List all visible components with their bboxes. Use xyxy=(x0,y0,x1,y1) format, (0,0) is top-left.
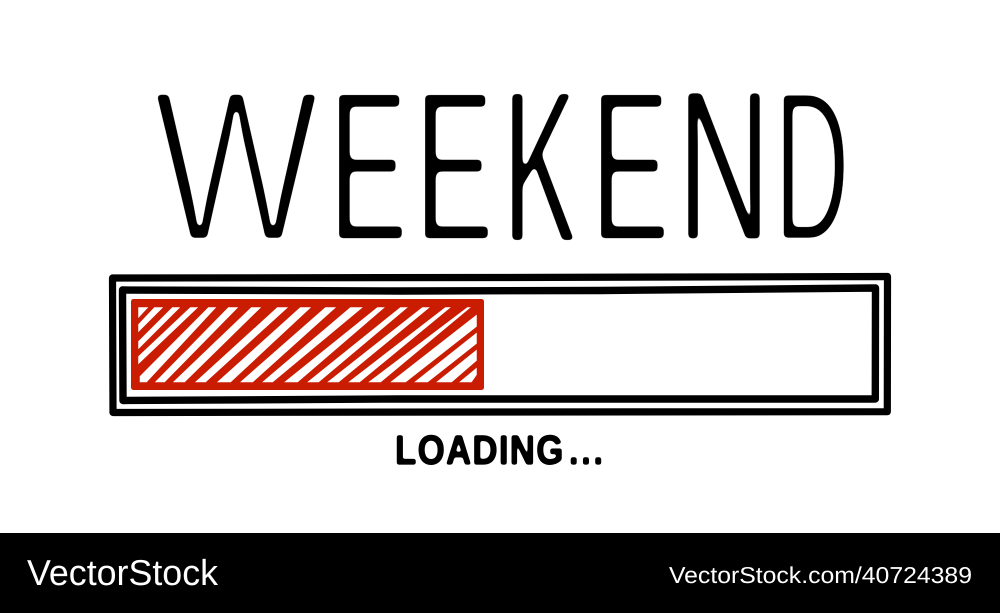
red progress fill with stripes xyxy=(131,299,484,390)
title: WEEKEND: N xyxy=(677,47,771,286)
title: WEEKEND: K xyxy=(502,40,580,295)
title: WEEKEND xyxy=(153,40,852,295)
footer logo text: VectorStock xyxy=(27,552,219,593)
loading label: LOADING... xyxy=(395,427,606,473)
footer image id: VectorStock.com/40724389 xyxy=(669,562,972,588)
inner frame xyxy=(122,288,876,400)
title: WEEKEND: D xyxy=(773,40,852,294)
progress bar xyxy=(112,276,888,412)
title: WEEKEND: E xyxy=(327,40,410,294)
title: WEEKEND: W xyxy=(153,45,320,288)
title: WEEKEND: E xyxy=(589,40,672,294)
outer frame xyxy=(112,276,888,412)
title: WEEKEND: E xyxy=(413,40,496,294)
footer band xyxy=(0,533,1000,613)
